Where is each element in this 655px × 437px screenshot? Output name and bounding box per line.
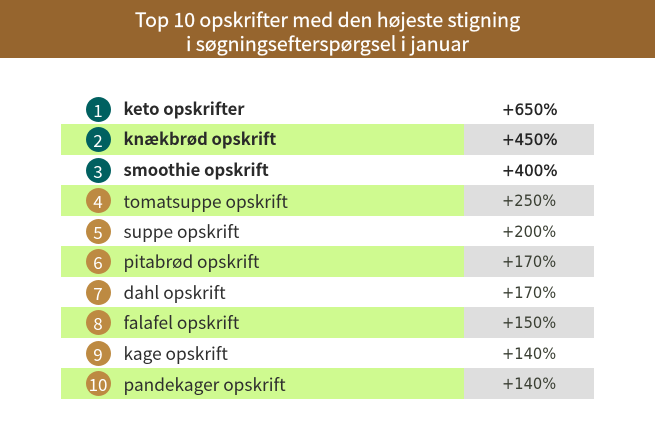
row 6: pitabrød opskrift: +170% (502, 252, 556, 271)
row 2: knækbrød opskrift: knækbrød opskrift (124, 126, 276, 150)
row 4: tomatsuppe opskrift: 4 (93, 188, 103, 213)
row 2: knækbrød opskrift: 2 (93, 127, 103, 152)
row 8: falafel opskrift: falafel opskrift (124, 309, 239, 334)
row 10: pandekager opskrift (61, 368, 594, 399)
row 1: keto opskrifter: keto opskrifter (124, 96, 245, 120)
row 7: dahl opskrift: dahl opskrift (124, 279, 226, 304)
row 5: suppe opskrift: +200% (502, 222, 556, 241)
title banner: i søgningsefterspørgsel i januar (186, 28, 469, 57)
row 5: suppe opskrift: suppe opskrift (124, 218, 239, 243)
row 3: smoothie opskrift: smoothie opskrift (124, 157, 269, 181)
row 8: falafel opskrift: +150% (502, 313, 556, 332)
title banner (0, 0, 655, 58)
row 10: pandekager opskrift: pandekager opskrift (124, 371, 286, 396)
title banner: Top 10 opskrifter med den højeste stigning (135, 4, 520, 33)
row 4: tomatsuppe opskrift: +250% (502, 191, 556, 210)
row 6: pitabrød opskrift (61, 246, 594, 277)
row 8: falafel opskrift (61, 307, 594, 338)
row 6: pitabrød opskrift: pitabrød opskrift (124, 248, 259, 273)
row 9: kage opskrift: +140% (502, 344, 556, 363)
row 6: pitabrød opskrift: 6 (93, 249, 103, 274)
row 7: dahl opskrift (86, 279, 556, 305)
row 9: kage opskrift (86, 340, 556, 366)
row 9: kage opskrift: 9 (93, 341, 103, 366)
row 3: smoothie opskrift (86, 157, 558, 183)
row 1: keto opskrifter (86, 96, 558, 122)
row 10: pandekager opskrift: 10 (89, 371, 107, 396)
row 5: suppe opskrift: 5 (93, 219, 103, 244)
row 1: keto opskrifter: 1 (93, 97, 103, 122)
row 7: dahl opskrift: 7 (93, 280, 103, 305)
row 8: falafel opskrift: 8 (93, 310, 103, 335)
row 10: pandekager opskrift: +140% (502, 374, 556, 393)
row 5: suppe opskrift (86, 218, 556, 244)
row 2: knækbrød opskrift (61, 124, 594, 155)
row 2: knækbrød opskrift: +450% (502, 130, 558, 149)
row 3: smoothie opskrift: 3 (93, 158, 103, 183)
row 3: smoothie opskrift: +400% (502, 161, 558, 180)
row 4: tomatsuppe opskrift (61, 185, 594, 216)
row 9: kage opskrift: kage opskrift (124, 340, 228, 365)
row 4: tomatsuppe opskrift: tomatsuppe opskrift (124, 188, 288, 213)
row 1: keto opskrifter: +650% (502, 100, 558, 119)
row 7: dahl opskrift: +170% (502, 283, 556, 302)
